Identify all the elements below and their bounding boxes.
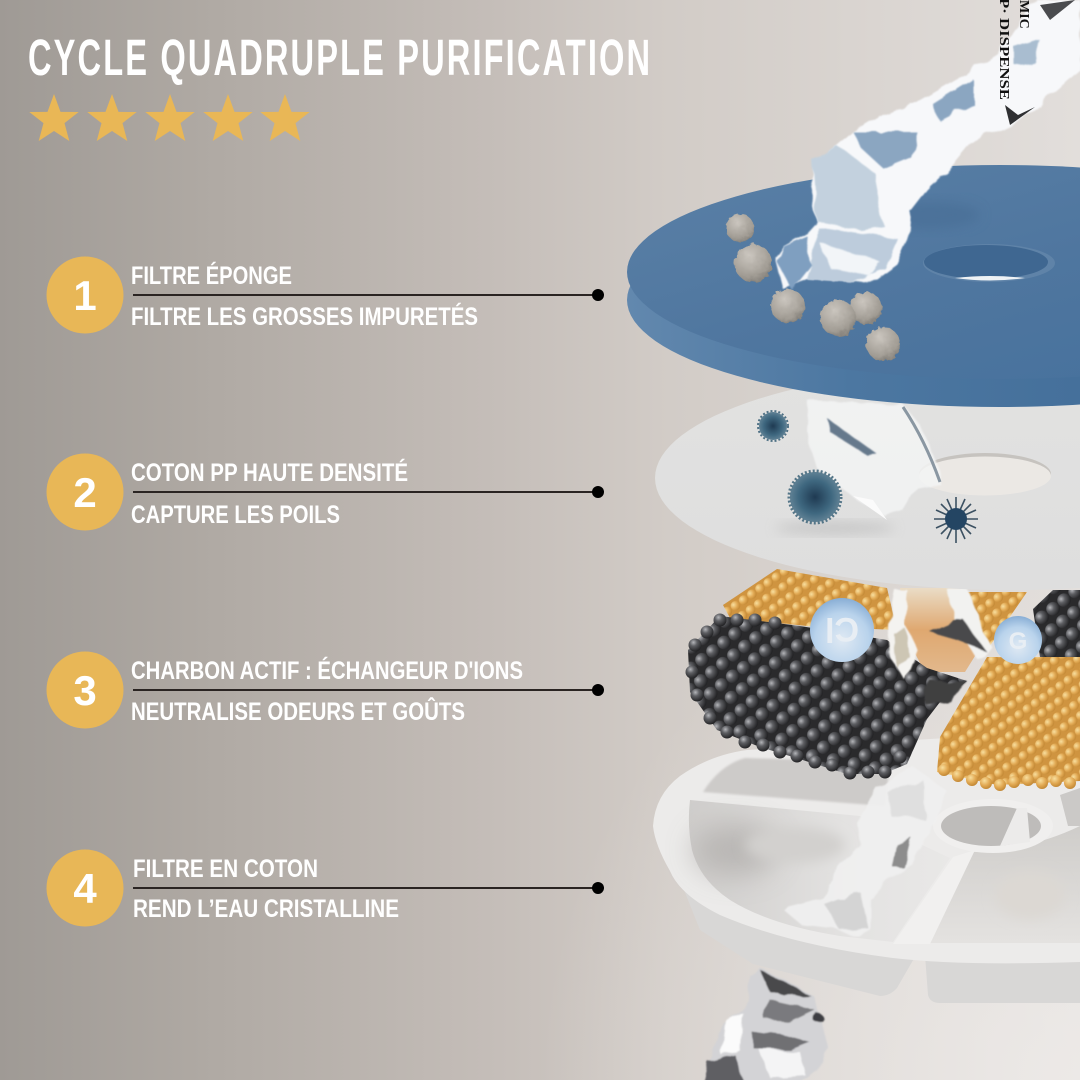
glass body of stream	[813, 146, 883, 229]
disc 2 centre hole	[919, 453, 1051, 496]
dirt particles	[726, 214, 900, 361]
step 4 description: REND L’EAU CRISTALLINE	[133, 895, 399, 923]
back right compartment	[1060, 788, 1080, 826]
lower water stream	[703, 968, 828, 1080]
layer 1: foam sponge disc	[627, 165, 1080, 407]
number badge 1: 1	[73, 272, 97, 319]
rating stars	[29, 94, 310, 141]
chlorine ion ball: Cl	[825, 610, 859, 648]
dark beads, back right	[1033, 590, 1080, 657]
connector 2	[133, 486, 604, 498]
orange beads, back left	[723, 569, 897, 630]
stray rotated product text	[996, 0, 1031, 100]
tray divider	[893, 850, 975, 944]
virus spiked	[934, 497, 978, 543]
step 3 heading: CHARBON ACTIF : ÉCHANGEUR D'IONS	[131, 656, 523, 685]
connector 1	[133, 289, 604, 301]
step 2	[46, 454, 604, 530]
ion ball, right: G	[1009, 628, 1027, 655]
step 2 description: CAPTURE LES POILS	[131, 501, 340, 529]
layer 3: activated carbon and ion exchange beads	[686, 569, 1080, 791]
dark carbon beads, front	[686, 614, 967, 780]
water stream between discs	[805, 400, 942, 520]
step 3 description: NEUTRALISE ODEURS ET GOÛTS	[131, 696, 465, 726]
ion ball, right	[994, 616, 1042, 664]
number badge 4	[46, 850, 124, 926]
step 1 description: FILTRE LES GROSSES IMPURETÉS	[131, 302, 478, 331]
number badge 3: 3	[73, 667, 97, 714]
step 4	[46, 850, 604, 926]
translucent pool at disc	[807, 226, 897, 282]
number badge 2	[46, 454, 124, 530]
orange bead scalloped edge	[938, 764, 1076, 791]
tray central hole	[933, 799, 1053, 853]
number badge 4: 4	[73, 865, 97, 912]
number badge 2: 2	[73, 469, 97, 516]
water stream over tray and beads	[783, 590, 990, 937]
water droplet	[777, 236, 812, 290]
tray outer rim	[653, 730, 1080, 963]
right compartment	[923, 826, 1080, 943]
dark bead scalloped edge	[686, 614, 906, 780]
left compartment	[689, 800, 950, 942]
tray lower cups	[680, 870, 1080, 1003]
step 1	[46, 256, 604, 334]
number badge 1	[46, 256, 124, 334]
sponge hole	[923, 244, 1055, 282]
layer 4: cotton filter tray	[653, 730, 1080, 1003]
stray rotated product text: P· DISPENSE	[996, 0, 1011, 100]
orange beads, back centre	[958, 592, 1027, 650]
virus small	[758, 411, 788, 441]
virus large	[789, 471, 841, 523]
step 4 heading: FILTRE EN COTON	[133, 855, 318, 883]
back compartment	[703, 758, 890, 806]
step 2 heading: COTON PP HAUTE DENSITÉ	[131, 458, 408, 487]
orange swirl behind water	[900, 588, 985, 672]
connector 3	[133, 684, 604, 696]
virus particles	[758, 411, 978, 543]
upper water stream	[775, 0, 1080, 290]
connector 4	[133, 882, 604, 894]
number badge 3	[46, 652, 124, 728]
orange beads, front right	[937, 657, 1080, 791]
title: CYCLE QUADRUPLE PURIFICATION	[28, 30, 650, 87]
chlorine ion ball	[810, 598, 874, 662]
layer 2: high density PP cotton disc	[655, 366, 1080, 590]
step 1 heading: FILTRE ÉPONGE	[131, 261, 292, 290]
stray rotated product text: MIC	[1016, 0, 1031, 29]
step 3	[46, 652, 604, 728]
